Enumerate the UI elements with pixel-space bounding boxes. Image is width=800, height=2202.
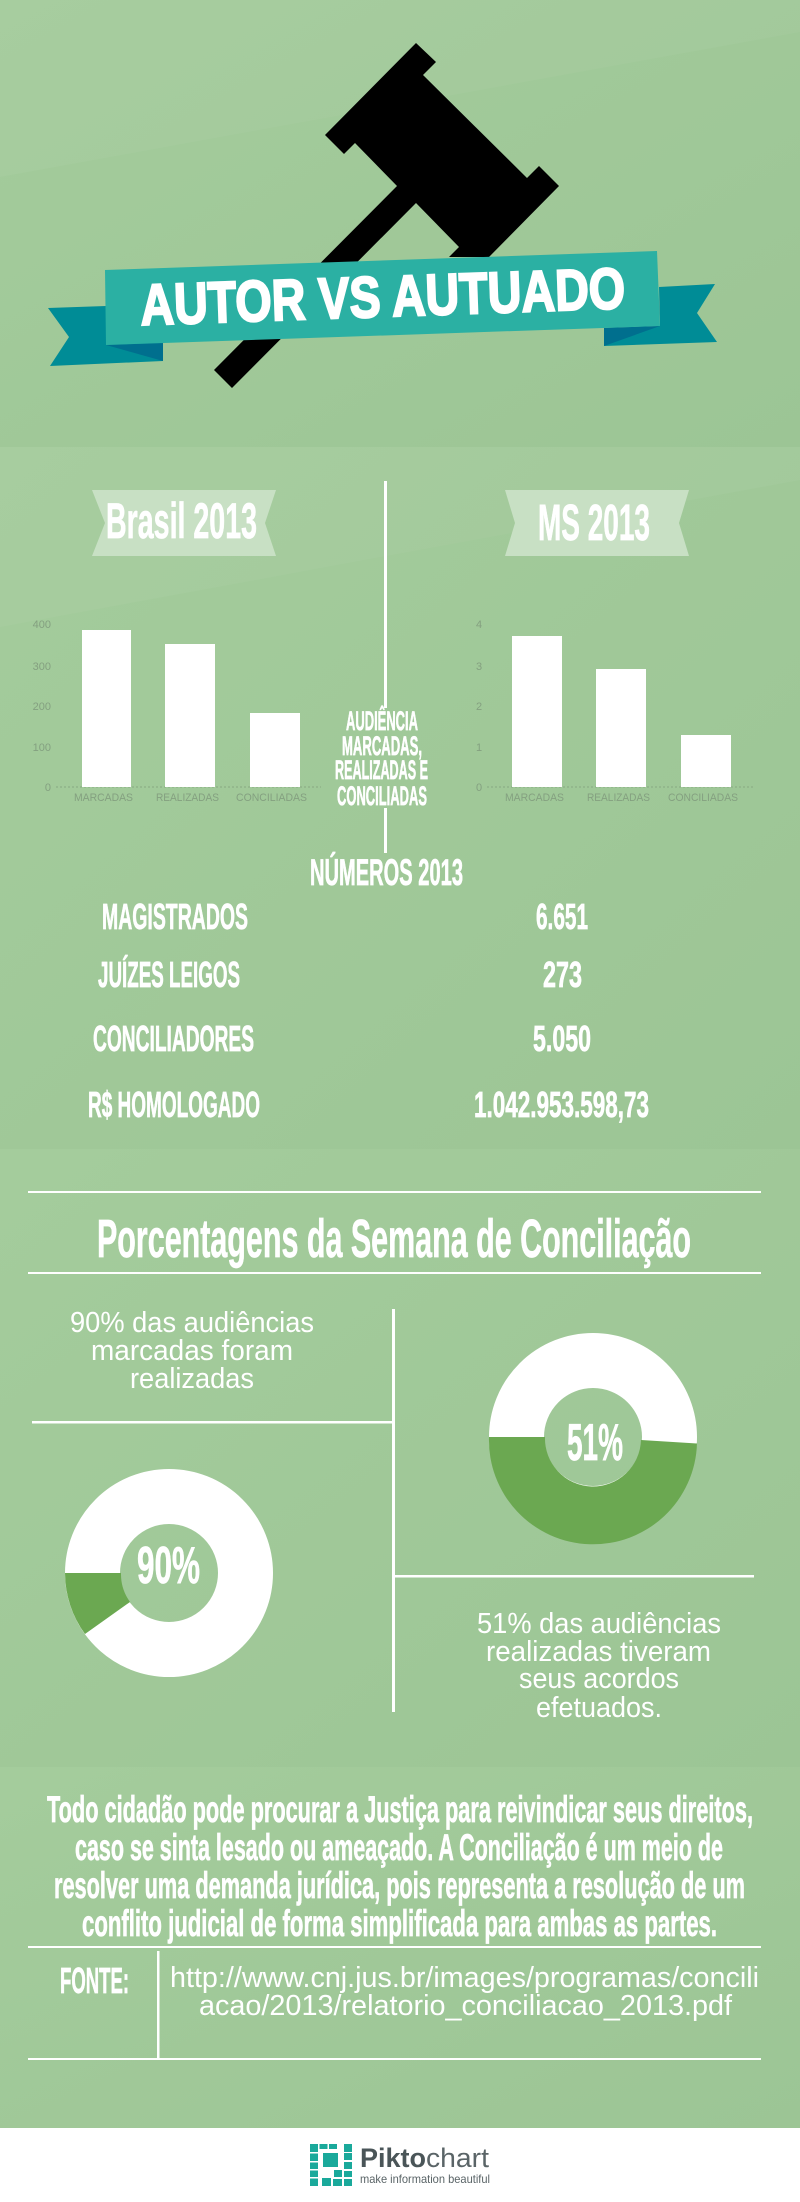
bar: marcadas	[82, 630, 131, 787]
x axis labels	[74, 792, 307, 804]
bar: realizadas	[165, 644, 215, 787]
banner: Brasil 2013: Brasil 2013	[106, 493, 257, 549]
logo wordmark: Pikto	[360, 2143, 426, 2173]
logo wordmark	[360, 2143, 490, 2173]
text: 51% das audiências	[477, 1608, 721, 1724]
text: 90% das audiências: 90% das audiências	[70, 1307, 314, 1339]
y axis labels: 2	[476, 701, 482, 713]
section: closing text background	[0, 1767, 800, 2128]
x axis labels: MARCADAS	[505, 792, 564, 804]
y axis labels: 0	[45, 782, 51, 794]
infographic: CONCILIADAS	[337, 781, 427, 811]
bar: realizadas	[596, 669, 646, 787]
title ribbon	[48, 251, 717, 366]
row: conciliadores: CONCILIADORES	[93, 1018, 254, 1059]
center vertical divider	[384, 481, 387, 853]
footer background	[0, 2128, 800, 2202]
y axis labels: 1	[476, 742, 482, 754]
row: conciliadores	[93, 1018, 591, 1059]
ribbon left fold	[106, 343, 163, 361]
bar chart: Brasil 2013	[33, 619, 321, 804]
icon: Piktochart logo	[310, 2143, 490, 2186]
text: 51% das audiências: 51% das audiências	[477, 1608, 721, 1640]
row: conciliadores: 5.050	[533, 1018, 591, 1059]
bar chart: MS 2013	[476, 619, 753, 804]
ribbon left tail	[48, 306, 163, 366]
x axis labels: CONCILIADAS	[668, 792, 738, 804]
banner: Brasil 2013	[92, 490, 276, 556]
text: 51% das audiências: seus acordos	[519, 1663, 679, 1695]
title text: AUTOR VS AUTUADO	[139, 256, 626, 338]
row: R$ homologado: 1.042.953.598,73	[474, 1084, 649, 1125]
y axis labels: 3	[476, 661, 482, 673]
bar: conciliadas	[681, 735, 731, 787]
y axis labels: 400	[33, 619, 51, 631]
row: magistrados	[102, 896, 588, 937]
source URL: http://www.cnj.jus.br/images/programas/concili	[170, 1962, 759, 1994]
row: magistrados: MAGISTRADOS	[102, 896, 248, 937]
label: Fonte: FONTE:	[60, 1960, 129, 2001]
paragraph: conciliation explanation	[47, 1789, 753, 1944]
y axis labels	[33, 619, 51, 794]
text: 90% das audiências: realizadas	[130, 1363, 254, 1395]
row: magistrados: 6.651	[536, 896, 588, 937]
donut chart: 51%	[489, 1360, 697, 1544]
source URL: acao/2013/relatorio_conciliacao_2013.pdf	[199, 1990, 733, 2022]
row: juízes leigos: 273	[543, 954, 582, 995]
text: 51% das audiências: realizadas tiveram	[486, 1636, 711, 1668]
section: header background	[0, 0, 800, 447]
ribbon right fold	[604, 326, 660, 346]
donut chart: 90%	[65, 1496, 246, 1650]
chart caption: MARCADAS,	[342, 731, 422, 761]
logo wordmark: chart	[426, 2143, 490, 2173]
row: juízes leigos	[98, 954, 582, 995]
y axis labels: 300	[33, 661, 51, 673]
icon: gavel	[214, 43, 559, 388]
row: juízes leigos: JUÍZES LEIGOS	[98, 954, 240, 995]
heading: Números 2013: NÚMEROS 2013	[310, 851, 463, 893]
logo tagline: make information beautiful	[360, 2172, 490, 2186]
infographic: REALIZADAS E	[335, 755, 428, 785]
x axis labels: MARCADAS	[74, 792, 133, 804]
banner: MS 2013: MS 2013	[538, 494, 650, 551]
x axis labels	[505, 792, 738, 804]
y axis labels: 200	[33, 701, 51, 713]
donut chart: 51%: 51%	[567, 1414, 623, 1472]
y axis labels: 0	[476, 782, 482, 794]
y axis labels: 4	[476, 619, 482, 631]
ribbon right tail	[604, 284, 717, 346]
chart caption	[335, 705, 428, 811]
bar: marcadas	[512, 636, 562, 787]
y axis labels: 100	[33, 742, 51, 754]
x axis labels: CONCILIADAS	[236, 792, 307, 804]
section: charts and numbers background	[0, 447, 800, 1149]
text: 90% das audiências	[70, 1307, 314, 1395]
y axis labels	[476, 619, 482, 794]
text: 90% das audiências: marcadas foram	[91, 1335, 293, 1367]
text: 51% das audiências: efetuados.	[536, 1692, 662, 1724]
ribbon body	[105, 251, 660, 345]
banner: MS 2013	[505, 490, 689, 556]
bar: conciliadas	[250, 713, 300, 787]
x axis labels: REALIZADAS	[587, 792, 650, 804]
chart caption: AUDIÊNCIA	[346, 705, 418, 736]
numbers table	[88, 896, 649, 1125]
row: R$ homologado: R$ HOMOLOGADO	[88, 1084, 260, 1125]
row: R$ homologado	[88, 1084, 649, 1125]
donut chart: 90%: 90%	[137, 1537, 200, 1595]
x axis labels: REALIZADAS	[156, 792, 219, 804]
source URL	[170, 1962, 759, 2022]
section: percentages background	[0, 1149, 800, 1767]
